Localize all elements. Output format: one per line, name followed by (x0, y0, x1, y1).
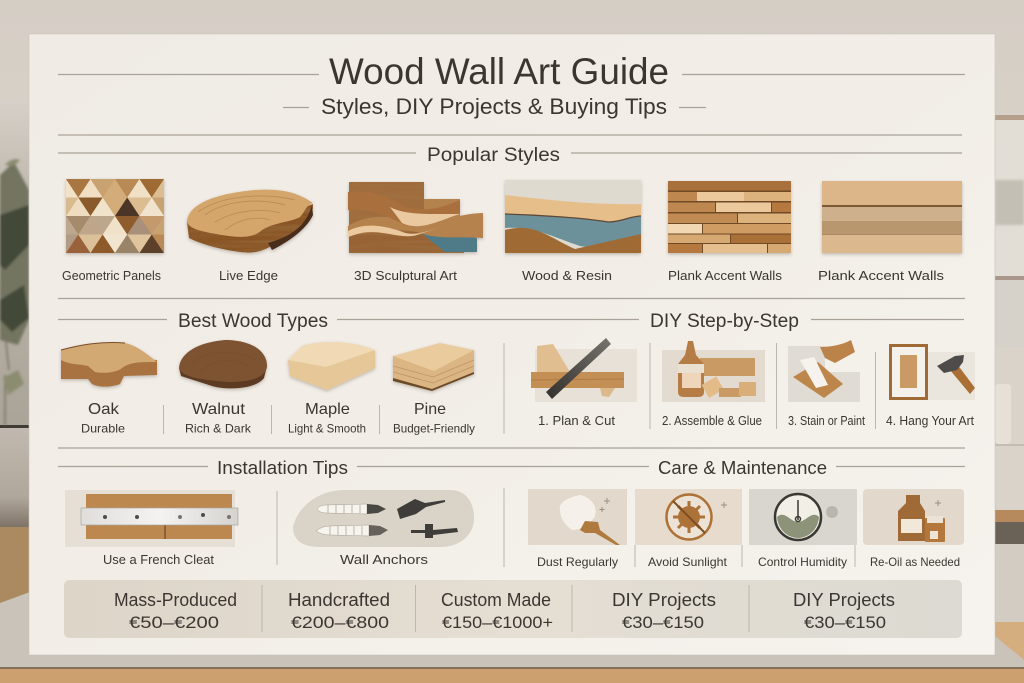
wood and resin art (505, 180, 641, 253)
price: custom made: Custom Made (441, 590, 551, 610)
label: Avoid Sunlight (648, 555, 728, 569)
label: Use a French Cleat (103, 553, 215, 567)
label: Live Edge (219, 268, 278, 283)
dust regularly (528, 489, 627, 545)
panel: best wood types (61, 340, 475, 436)
re-oil as needed (863, 489, 964, 545)
price: handcrafted (288, 590, 390, 632)
price: mass-produced (114, 590, 237, 632)
wall anchors (293, 490, 474, 547)
label: Geometric Panels (62, 268, 161, 283)
walnut sample (179, 340, 267, 388)
price: custom made (441, 590, 553, 632)
panel: care and maintenance (528, 489, 964, 569)
maple sample (288, 342, 375, 390)
price: custom made: €150–€1000+ (442, 613, 553, 632)
heading: popular styles: Popular Styles (427, 145, 560, 166)
price: mass-produced: €50–€200 (129, 613, 219, 632)
plank wall two (822, 181, 962, 253)
labels: Walnut (192, 401, 246, 418)
labels: Light & Smooth (288, 422, 366, 436)
price: handcrafted: €200–€800 (291, 613, 389, 632)
label: Wood & Resin (522, 268, 612, 283)
heading: care and maintenance: Care & Maintenance (658, 458, 827, 478)
label: 3D Sculptural Art (354, 268, 457, 283)
plank wall one (668, 181, 791, 253)
step 1 plan and cut (531, 338, 637, 402)
panel: diy steps (531, 338, 975, 429)
price: diy projects (612, 590, 716, 632)
title: Wood Wall Art Guide (329, 51, 669, 92)
labels: Budget-Friendly (393, 422, 475, 436)
3D sculptural art (348, 182, 483, 253)
label: 2. Assemble & Glue (662, 413, 762, 428)
label: 4. Hang Your Art (886, 413, 974, 428)
live edge slab (187, 190, 313, 253)
price: diy projects second: €30–€150 (804, 613, 886, 632)
subtitle: Styles, DIY Projects & Buying Tips (321, 94, 667, 119)
oak sample (61, 342, 157, 387)
control humidity (749, 489, 857, 545)
french cleat (65, 490, 238, 547)
labels: Maple (305, 401, 350, 418)
pine sample (393, 343, 474, 391)
price table (64, 580, 962, 638)
label: Plank Accent Walls (818, 268, 945, 283)
heading: best wood types: Best Wood Types (178, 311, 328, 332)
step 4 hang your art (889, 344, 975, 400)
price: diy projects second: DIY Projects (793, 590, 895, 610)
geometric panels art (66, 179, 164, 253)
labels: Durable (81, 422, 125, 436)
label: Control Humidity (758, 555, 847, 569)
avoid sunlight (635, 489, 742, 545)
label: Dust Regularly (537, 555, 618, 569)
label: 3. Stain or Paint (788, 413, 865, 428)
panel: popular styles (62, 179, 962, 283)
label: Plank Accent Walls (668, 268, 783, 283)
labels (81, 401, 475, 436)
labels: Oak (88, 401, 120, 418)
heading: installation tips: Installation Tips (217, 458, 348, 478)
panel: installation tips (65, 490, 474, 567)
potted plant (0, 159, 30, 527)
price: handcrafted: Handcrafted (288, 590, 390, 610)
heading: diy step-by-step: DIY Step-by-Step (650, 311, 799, 332)
label: Re-Oil as Needed (870, 555, 960, 569)
price: mass-produced: Mass-Produced (114, 590, 237, 610)
price: diy projects second (793, 590, 895, 632)
step 2 assemble and glue (662, 341, 765, 402)
price: diy projects: DIY Projects (612, 590, 716, 610)
step 3 stain or paint (788, 340, 860, 402)
labels: Rich & Dark (185, 422, 252, 436)
labels: Pine (414, 401, 446, 418)
label: Wall Anchors (340, 552, 429, 567)
label: 1. Plan & Cut (538, 413, 615, 428)
price: diy projects: €30–€150 (622, 613, 704, 632)
